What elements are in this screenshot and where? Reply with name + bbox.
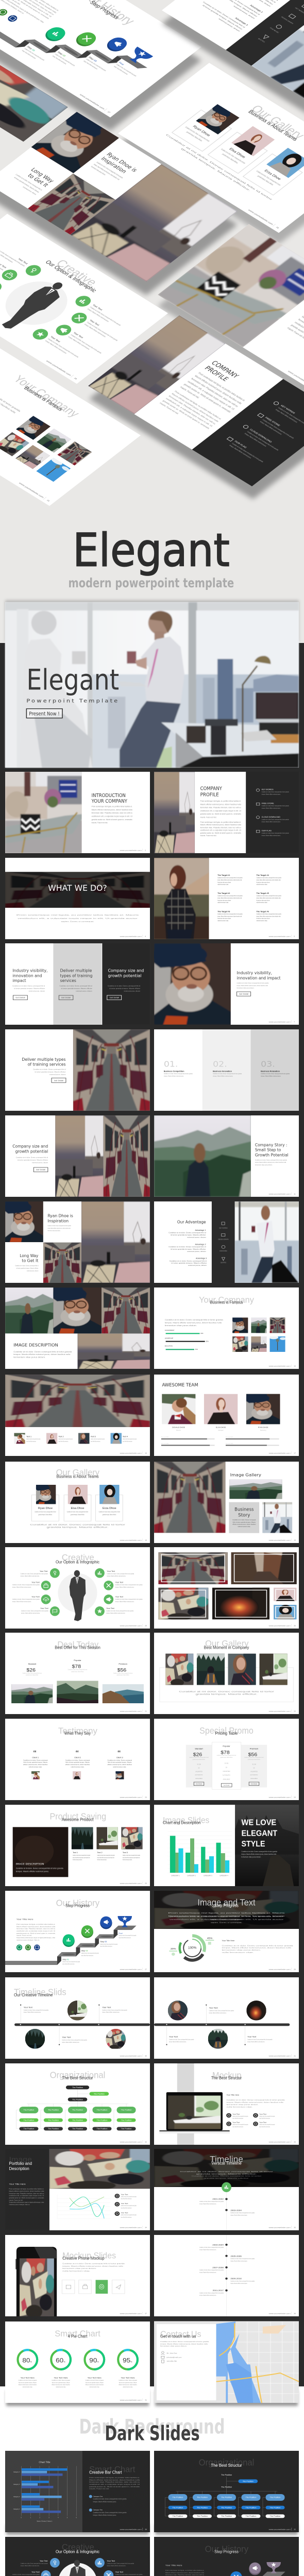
dark slide: step progress — [154, 2537, 299, 2576]
slide 11: company story: Growth Potential — [255, 1153, 289, 1158]
slide 12: our advantage: Advantage 1 — [195, 1229, 206, 1231]
slide 42: contact map: 123-456-789 — [166, 2360, 177, 2362]
slide 28: image and text with donut: 45% — [207, 1937, 213, 1940]
slide 36: vertical timeline continued: 2011-2017 — [213, 2289, 224, 2292]
slide 9: numbered columns: Business Innovation — [213, 1071, 232, 1073]
slide 9: numbered columns — [154, 1029, 299, 1111]
slide 16: train with thumbnails: Text 3 — [91, 1436, 96, 1437]
slide 16: train with thumbnails: 16 — [145, 1452, 147, 1454]
slide 12: our advantage — [154, 1201, 299, 1283]
slide 36: vertical timeline continued: 2005-2006 — [230, 2255, 242, 2257]
slide 42: contact map — [154, 2321, 299, 2403]
slide 6: three columns: Get Detail — [110, 996, 119, 999]
slide 3: company profile: COMPANY — [200, 786, 223, 791]
slide 9: numbered columns: Business Relaxation — [261, 1071, 280, 1073]
slide 7: industry visibility — [152, 943, 299, 1025]
slide 23: testimony: Client 3 — [116, 1757, 123, 1758]
slide 15: your company: 85% — [206, 1341, 209, 1342]
slide 17: awesome team: DONALD DHOE — [172, 1427, 185, 1429]
slide 6: three columns — [5, 943, 150, 1025]
slide 11: company story: Company Story : — [255, 1143, 287, 1148]
slide 16: train with thumbnails: Text 1 — [26, 1436, 31, 1437]
slide 6: three columns: growth potential — [108, 974, 141, 978]
slide 16: train with thumbnails: Text 4 — [123, 1436, 128, 1437]
slide 6: three columns: impact — [12, 978, 26, 984]
slide 42: contact map: johndoe@mail.com — [166, 2357, 182, 2358]
slide 28: image and text with donut: Your Title Here — [222, 1940, 234, 1942]
slide 15: your company — [154, 1287, 299, 1369]
slide 31: timeline right: Your Text — [169, 2036, 178, 2038]
slide 21: deal today: Standart — [28, 1663, 37, 1665]
slide 34: portfolio and line chart: Portfolio and — [9, 2161, 32, 2166]
dark slide: bar chart: 3 — [48, 2517, 50, 2518]
slide 26: bar chart and we love elegant style — [154, 1805, 299, 1886]
slide 6: three columns: Deliver multiple — [60, 969, 92, 973]
slide 33: laptop mockup — [154, 2063, 299, 2145]
slide 33: laptop mockup: Your Title Here — [227, 2094, 239, 2096]
slide 21: deal today: Deal Today — [57, 1639, 98, 1649]
slide 28: image and text with donut — [154, 1891, 299, 1972]
slide 6: three columns: Company size and — [108, 969, 144, 973]
slide 13: ryan dhoe collage: to Get It — [22, 1259, 39, 1263]
slide 15: your company: Your Company — [199, 1295, 254, 1304]
slide 41: four pie charts: Smart Chart — [55, 2329, 100, 2338]
slide 4: what we do: WHAT WE DO? — [48, 884, 107, 893]
slide 30: timeline left: Timeline Slids — [14, 1987, 66, 1997]
slide 8: deliver multiple types: of training services — [28, 1062, 66, 1067]
slide 9: numbered columns: 01. — [164, 1060, 178, 1069]
slide 17: awesome team: 17 — [294, 1452, 296, 1454]
slide 28: image and text with donut: Step Progress — [214, 1903, 239, 1908]
dark slide: bar chart: 38 — [145, 2529, 147, 2530]
slide 33: laptop mockup: The Best Structur — [211, 2075, 242, 2080]
slide 25: product saving: Text 1 — [73, 1852, 78, 1854]
dark slide: bar chart: Series 3 Series 2 Series 1 — [37, 2521, 53, 2522]
slide 5: the targets: The Target #4 — [257, 874, 269, 876]
slide 26: bar chart and we love elegant style: Image Slides — [163, 1815, 209, 1825]
slide 42: contact map: Mr. John Doe — [166, 2352, 177, 2354]
slide 15: your company: 80% — [200, 1333, 204, 1334]
slide 12: our advantage: KEY WORDS — [219, 1228, 228, 1229]
dark slide: bar chart: Category 1 — [13, 2509, 20, 2510]
slide 17: awesome team: ELSA DHOE — [216, 1427, 226, 1429]
slide 30: framed gallery: 30 — [294, 1625, 296, 1626]
slide 18: our gallery team: Erza Dhoe — [103, 1507, 116, 1510]
slide 18: our gallery team: Elsa Dhoe — [71, 1507, 85, 1510]
dark slide: bar chart — [5, 2451, 150, 2532]
column chart: CATEGORY 4 — [219, 1875, 229, 1877]
slide 23: testimony: Client 1 — [32, 1757, 39, 1758]
slide 18: our gallery team — [5, 1462, 150, 1543]
background: dark slides section — [0, 643, 304, 2386]
dark slide: bar chart: Category 2 — [13, 2496, 20, 2498]
slide 25: product saving: IMAGE DESCRIPTION — [16, 1863, 44, 1866]
slide 41: four pie charts: Your Text Here — [21, 2377, 35, 2379]
slide 5: the targets — [154, 858, 299, 939]
slide 15: your company: Business is Famous — [210, 1300, 243, 1305]
slide 36: vertical timeline continued: 2007-2008 — [212, 2266, 224, 2268]
slide 7: industry visibility: innovation and impact — [237, 976, 281, 981]
slide 10: company size: Get Detail — [36, 1168, 45, 1171]
slide 12: our advantage: Advantage 2 — [195, 1244, 206, 1245]
slide 34: portfolio and line chart: 34 — [145, 2227, 147, 2228]
slide 25: product saving: Product Saving — [49, 1811, 106, 1821]
slide 41: four pie charts: 90% — [89, 2357, 99, 2364]
slide 29: infographic — [5, 1547, 150, 1629]
slide 32: org chart — [5, 2063, 150, 2145]
slide 30: timeline left: Your Text — [24, 2006, 33, 2008]
slide 26: bar chart and we love elegant style: STYLE — [242, 1839, 265, 1849]
slide 35: vertical timeline: Timeline — [210, 2155, 243, 2164]
slide 17: awesome team — [154, 1375, 299, 1456]
slide 35: vertical timeline: 2001-2002 — [212, 2198, 224, 2200]
slide 18: our gallery team: Our Gallery — [56, 1467, 99, 1477]
slide 17: awesome team: Marketing — [260, 1430, 266, 1431]
slide 7: industry visibility: Industry visibility, — [237, 971, 272, 976]
slide 3: company profile: PROFILE — [200, 792, 219, 798]
slide 25: product saving: Text 3 — [123, 1852, 128, 1854]
dark slide: infographic — [5, 2537, 150, 2576]
slide 26: bar chart and we love elegant style: WE LOVE — [242, 1818, 276, 1827]
slide 41: four pie charts: 41 — [145, 2399, 147, 2401]
slide 33: laptop mockup: Your Text — [259, 2113, 266, 2115]
slide 41: four pie charts: Your Text Here — [54, 2377, 68, 2379]
slide 17: awesome team: Personal Skills — [226, 1443, 233, 1444]
slide 13: ryan dhoe collage: Ryan Dhoe is — [47, 1214, 73, 1218]
slide 30: timeline left: Your Text — [62, 2036, 71, 2039]
slide 12: our advantage: OUR MUSIC — [219, 1250, 227, 1252]
slide 6: three columns: Industry visibility, — [12, 969, 47, 973]
slide 23: testimony: What They Say — [64, 1731, 91, 1736]
slide 31: timeline right: Your Text — [209, 2007, 218, 2009]
slide 21: deal today: 21 — [145, 1710, 147, 1712]
slide 12: our advantage: Our Advantage — [177, 1220, 206, 1225]
slide 35: vertical timeline: Vertical Timeline — [211, 2161, 242, 2166]
slide 15: your company: ACHIEVEMENT — [165, 1330, 175, 1331]
slide 2: introduction: INTRODUCTION — [92, 793, 126, 799]
subtitle: modern powerpoint template — [68, 576, 234, 591]
slide 3: company profile: FREE STORE — [262, 803, 274, 804]
slide 8: deliver multiple types: Get Detail — [54, 1079, 63, 1081]
slide 28: image and text with donut: 20% — [171, 1947, 176, 1951]
dark slide: bar chart: 6 — [76, 2517, 77, 2518]
slide 11: company story — [154, 1115, 299, 1197]
background: light top section — [0, 0, 304, 643]
dark slide: bar chart: 0 — [21, 2517, 22, 2518]
slide 17: awesome team: AWESOME TEAM — [162, 1383, 198, 1388]
slide 33: laptop mockup: Your Text — [259, 2122, 266, 2124]
column chart: CATEGORY 2 — [187, 1875, 196, 1877]
phone — [15, 2247, 57, 2318]
slide 21: deal today: Best Offer for This Season — [55, 1645, 100, 1650]
slide 11: company story: Small Step to — [255, 1148, 281, 1153]
slide 5: the targets: 5 — [294, 936, 295, 937]
slide 37: phone mockup: Mockup Slides — [62, 2250, 116, 2260]
slide 36: vertical timeline continued: 2003-2004 — [212, 2244, 224, 2246]
slide 41: four pie charts: Your Text Here — [121, 2377, 135, 2379]
slide 34: portfolio and line chart: Your Text — [121, 2194, 128, 2195]
slide 16: train with thumbnails: Text 2 — [59, 1436, 64, 1437]
slide 21: deal today: $56 — [117, 1668, 127, 1673]
slide 21: deal today: $26 — [26, 1668, 36, 1673]
slide 28: image and text with donut: Image and Text — [197, 1897, 256, 1907]
slide 30: timeline left: Your Text — [102, 2006, 111, 2008]
slide 6: three columns: Get Detail — [61, 996, 71, 999]
slide 22: best moment — [154, 1633, 299, 1714]
slide 15: your company: 15 — [294, 1365, 296, 1367]
slide 34: portfolio and line chart: Your Title Here — [9, 2183, 26, 2185]
slide 42: contact map: Get in touch with us — [160, 2334, 196, 2339]
slide 37: phone mockup: 37 — [145, 2313, 147, 2314]
slide 10: company size: Company size and — [12, 1144, 48, 1149]
slide 36: vertical timeline continued — [154, 2235, 299, 2316]
slide 31: timeline right: Your Text — [247, 2036, 257, 2038]
dark slide: bar chart: Category 4 — [13, 2471, 20, 2473]
slide 41: four pie charts: 60% — [56, 2357, 65, 2364]
slide 42: contact map: Contact Us — [160, 2329, 201, 2339]
hero button — [26, 709, 62, 718]
slide 23: testimony — [5, 1719, 150, 1800]
slide 23: testimony: Testimony — [58, 1726, 97, 1736]
slide 15: your company: LEADERSHIP — [165, 1337, 174, 1339]
heading: dark slides: Dark Slides — [105, 2421, 200, 2445]
donut chart: 100% — [188, 1946, 197, 1950]
slide 18: our gallery team: 18 — [145, 1539, 147, 1541]
slide 2: introduction: YOUR COMPANY — [91, 799, 128, 804]
dark slide: bar chart: Smart Chart — [89, 2464, 135, 2474]
slide 37: phone mockup — [5, 2235, 150, 2318]
slide 41: four pie charts — [5, 2321, 150, 2403]
background: white dark-slides section — [0, 2386, 304, 2576]
dark slide: bar chart: 5 — [67, 2517, 68, 2518]
slide 31: timeline right — [154, 1977, 299, 2059]
slide 31: timeline right: 31 — [294, 2055, 296, 2057]
slide 33: laptop mockup: Your Text — [232, 2113, 240, 2115]
slide 41: four pie charts: 95% — [123, 2357, 132, 2364]
donut chart — [176, 1931, 209, 1964]
slide 17: awesome team: RYAN DHOE — [258, 1427, 268, 1429]
slide 34: portfolio and line chart: Description — [9, 2166, 29, 2171]
slide 25: product saving: 25 — [145, 1883, 147, 1884]
slide 5: the targets: The Target #1 — [217, 874, 230, 876]
dark slide: bar chart: Chart Title — [39, 2461, 50, 2464]
slide 12: our advantage: DESIGN GRAPH — [218, 1239, 229, 1241]
slide 30: timeline left — [5, 1977, 150, 2059]
slide 4: what we do — [5, 858, 150, 939]
slide 3: company profile: CLOUD DOWNLOAD — [262, 816, 280, 818]
isometric slide mockups — [0, 0, 304, 506]
slide 34: portfolio and line chart: Your Text — [121, 2212, 128, 2214]
slide 8: deliver multiple types: Deliver multiple types — [22, 1057, 66, 1062]
dark slide: org chart — [154, 2451, 299, 2532]
slide 23: testimony: “ — [76, 1749, 79, 1758]
column chart — [167, 1832, 232, 1877]
slide 21: deal today: Popular — [74, 1659, 81, 1662]
slide 17: awesome team: Manager — [218, 1430, 224, 1431]
slide 19: image gallery: Image Gallery — [230, 1473, 261, 1478]
slide 6: three columns: Get Detail — [15, 996, 25, 999]
column chart: CATEGORY 1 — [171, 1875, 180, 1877]
slide 14: image description — [5, 1287, 150, 1369]
slide 33: laptop mockup: Mockup — [212, 2070, 242, 2080]
hero subtitle: Powerpoint Template — [26, 698, 117, 704]
slide 14: image description: IMAGE DESCRIPTION — [13, 1343, 58, 1348]
slide 9: numbered columns: 02. — [213, 1060, 227, 1069]
slide 21: deal today — [5, 1633, 150, 1714]
slide 26: bar chart and we love elegant style: Chart and Description — [163, 1820, 201, 1825]
slide 23: testimony: Client 2 — [74, 1757, 81, 1758]
slide shadows over white section — [5, 2391, 299, 2576]
dark slide: bar chart: 1 — [30, 2517, 31, 2518]
slide 15: your company: EDUCATION — [165, 1346, 173, 1347]
dark slide: bar chart: 4 — [58, 2517, 59, 2518]
slide 27: step progress green — [5, 1891, 150, 1972]
hero slide: man at window — [5, 602, 299, 768]
hero title text: Elegant — [26, 664, 119, 696]
slide 19: image gallery: Story — [238, 1513, 250, 1518]
laptop — [159, 2092, 230, 2133]
slide 34: portfolio and line chart: Your Text — [121, 2202, 128, 2205]
slide 19: image gallery: 19 — [294, 1539, 296, 1541]
slide 8: deliver multiple types — [5, 1029, 150, 1111]
slide 23: testimony: 23 — [145, 1797, 147, 1798]
heading: dark background ghost: Dark Background — [79, 2415, 225, 2438]
hero button: Present Now ! — [29, 711, 60, 717]
slide 33: laptop mockup: 33 — [294, 2141, 296, 2143]
slide 7: industry visibility: Get Detail — [239, 993, 248, 995]
slide 24: pricing table — [154, 1719, 299, 1800]
slide 7: industry visibility: 7 — [294, 1021, 295, 1023]
slide 2: introduction — [5, 772, 150, 853]
dark slide: bar chart: Category Two — [93, 2509, 103, 2511]
dark slide: bar chart: Category One — [93, 2496, 103, 2497]
slide 13: ryan dhoe collage: Inspiration — [47, 1219, 69, 1224]
slide 9: numbered columns: Business Competition — [164, 1071, 184, 1073]
slide 13: ryan dhoe collage: Long Way — [20, 1253, 38, 1259]
dark slide: bar chart: Category 3 — [13, 2484, 20, 2485]
slide 18: our gallery team: Ryan Dhoe — [38, 1507, 53, 1510]
slide 30: timeline left: 30 — [145, 2055, 147, 2057]
dark slide: bar chart: 2 — [39, 2517, 40, 2518]
slide 18: our gallery team: Business is About Teams — [56, 1474, 99, 1479]
slide 17: awesome team: Director — [176, 1430, 181, 1431]
slide 34: portfolio and line chart — [5, 2149, 150, 2230]
slide 6: three columns: services — [60, 978, 76, 984]
slide 35: vertical timeline: 2003-2004 — [230, 2209, 242, 2211]
slide 26: bar chart and we love elegant style: ELEGANT — [242, 1828, 278, 1838]
heading: dark background ghost — [79, 2415, 225, 2445]
slide 10: company size — [5, 1115, 150, 1197]
column chart: CATEGORY 3 — [204, 1875, 212, 1877]
slide 9: numbered columns: 03. — [261, 1060, 275, 1069]
slide 19: image gallery — [154, 1462, 299, 1543]
slide 17: awesome team: Personal Skills — [226, 1436, 233, 1438]
slide 23: testimony: “ — [117, 1749, 121, 1758]
slide 5: the targets: The Target #5 — [257, 892, 269, 894]
slide 22: best moment: Our Gallery — [205, 1639, 249, 1648]
slide 12: our advantage: Advantage 3 — [196, 1258, 207, 1260]
slide 22: best moment: 22 — [294, 1710, 296, 1712]
line chart — [57, 2195, 111, 2219]
slide 34: portfolio and line chart: Image — [9, 2156, 32, 2164]
slide 2: introduction: 2 — [145, 850, 146, 851]
slide 16: train with thumbnails — [5, 1375, 150, 1456]
slide 30: framed gallery — [154, 1547, 299, 1629]
hero photo — [5, 602, 299, 768]
title: Elegant — [68, 524, 234, 591]
slide 41: four pie charts: Your Text Here — [88, 2377, 102, 2379]
hero shadow — [5, 600, 299, 641]
slide 21: deal today: $78 — [72, 1664, 81, 1669]
slide 5: the targets: The Target #3 — [217, 911, 230, 912]
slide 21: deal today: Premium — [119, 1663, 127, 1665]
slide 3: company profile: OUR FLAG — [262, 830, 272, 832]
slide 3: company profile: KEY WORDS — [262, 789, 274, 790]
slide 11: company story: 11 — [294, 1193, 296, 1195]
slide 6: three columns: innovation and — [12, 974, 42, 978]
slide 37: phone mockup: Creative Phone Mockup — [62, 2256, 105, 2261]
slide 35: vertical timeline: 35 — [294, 2227, 296, 2228]
slide 13: ryan dhoe collage — [4, 1201, 150, 1283]
slide 30: timeline left: Our Creative Timeline — [14, 1992, 53, 1997]
slide 35: vertical timeline — [154, 2149, 299, 2230]
slide 17: awesome team: Personal Skills — [161, 1436, 169, 1438]
slide 33: laptop mockup: Your Text — [232, 2122, 240, 2124]
slide 19: image gallery: Business — [234, 1507, 254, 1512]
slide 41: four pie charts: 4 Pie Chart — [68, 2334, 88, 2338]
slide 15: your company: 60% — [195, 1349, 198, 1350]
slide 22: best moment: Best Moment in Company — [204, 1645, 249, 1650]
slide 12: our advantage: QUOTES — [221, 1262, 226, 1263]
slide 10: company size: growth potential — [15, 1149, 48, 1154]
slide 36: vertical timeline continued: 36 — [294, 2313, 296, 2314]
slide 25: product saving: Awesome Product — [62, 1817, 94, 1822]
slide 25: product saving: Text 2 — [97, 1852, 103, 1854]
slide 41: four pie charts: 80% — [22, 2357, 32, 2364]
slide 5: the targets: The Target #6 — [257, 911, 269, 912]
slide 5: the targets: The Target #2 — [217, 892, 230, 894]
slide 28: image and text with donut: 28 — [294, 1969, 296, 1970]
slide 17: awesome team: Personal Skills — [161, 1443, 169, 1444]
slide 25: product saving — [5, 1805, 150, 1886]
slide 36: vertical timeline continued: 2009-2010 — [230, 2277, 242, 2280]
slide 23: testimony: “ — [33, 1749, 37, 1758]
title: Elegant: Elegant — [73, 524, 230, 577]
slide 4: what we do: 4 — [145, 936, 146, 937]
slide 6: three columns: types of training — [60, 974, 93, 978]
dark slide: bar chart: Creative Bar Chart — [89, 2470, 122, 2475]
slide 3: company profile — [154, 772, 299, 853]
